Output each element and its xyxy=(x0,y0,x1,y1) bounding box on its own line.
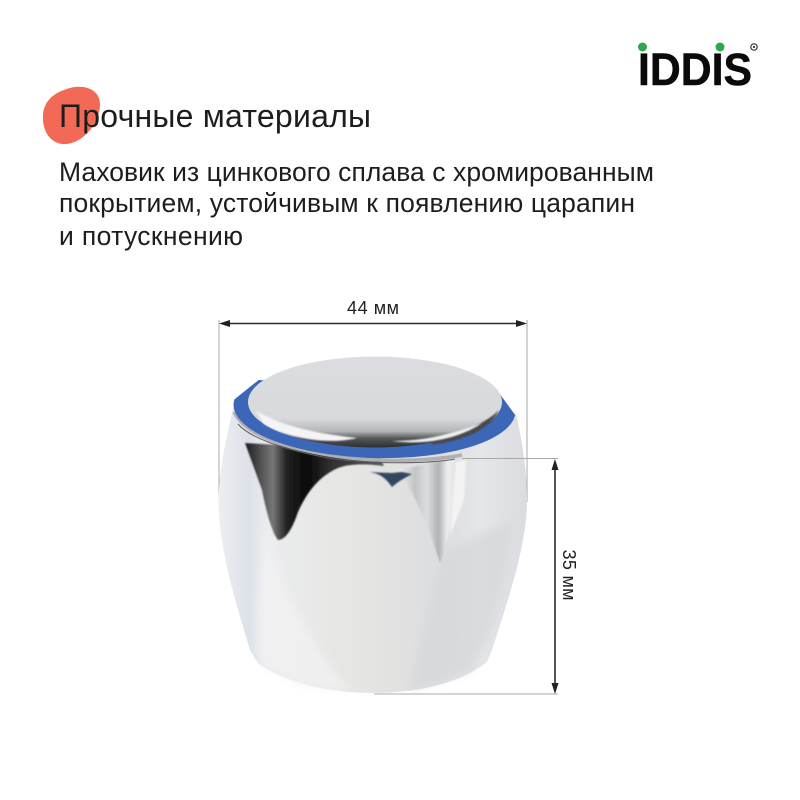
description text: покрытием, устойчивым к появлению царапин xyxy=(59,188,635,218)
description text: и потускнению xyxy=(59,221,243,251)
knob body xyxy=(218,408,527,693)
dimension: width 44 mm: 44 мм xyxy=(347,298,399,318)
cap highlights xyxy=(256,411,357,441)
right reflective stripe xyxy=(398,458,456,563)
description text xyxy=(59,157,654,251)
chrome cap xyxy=(248,356,502,448)
dimension: width 44 mm xyxy=(219,298,527,502)
blue ring xyxy=(234,380,515,458)
body facet shading xyxy=(257,520,350,692)
white highlight right of stripe xyxy=(450,460,466,535)
title blob xyxy=(43,87,100,144)
dark reflection xyxy=(245,443,384,540)
description text: Маховик из цинкового сплава с хромированным xyxy=(59,157,654,187)
cap side crescent xyxy=(432,410,499,445)
dimension: height 35 mm xyxy=(374,458,579,694)
IDDIS logo: IDDIS xyxy=(638,44,752,95)
navy reflection xyxy=(368,472,412,487)
chrome edge under ring xyxy=(234,412,462,460)
chrome knob xyxy=(218,354,527,693)
dimension: height 35 mm: 35 мм xyxy=(559,550,579,600)
title: Прочные материалы xyxy=(59,98,371,134)
